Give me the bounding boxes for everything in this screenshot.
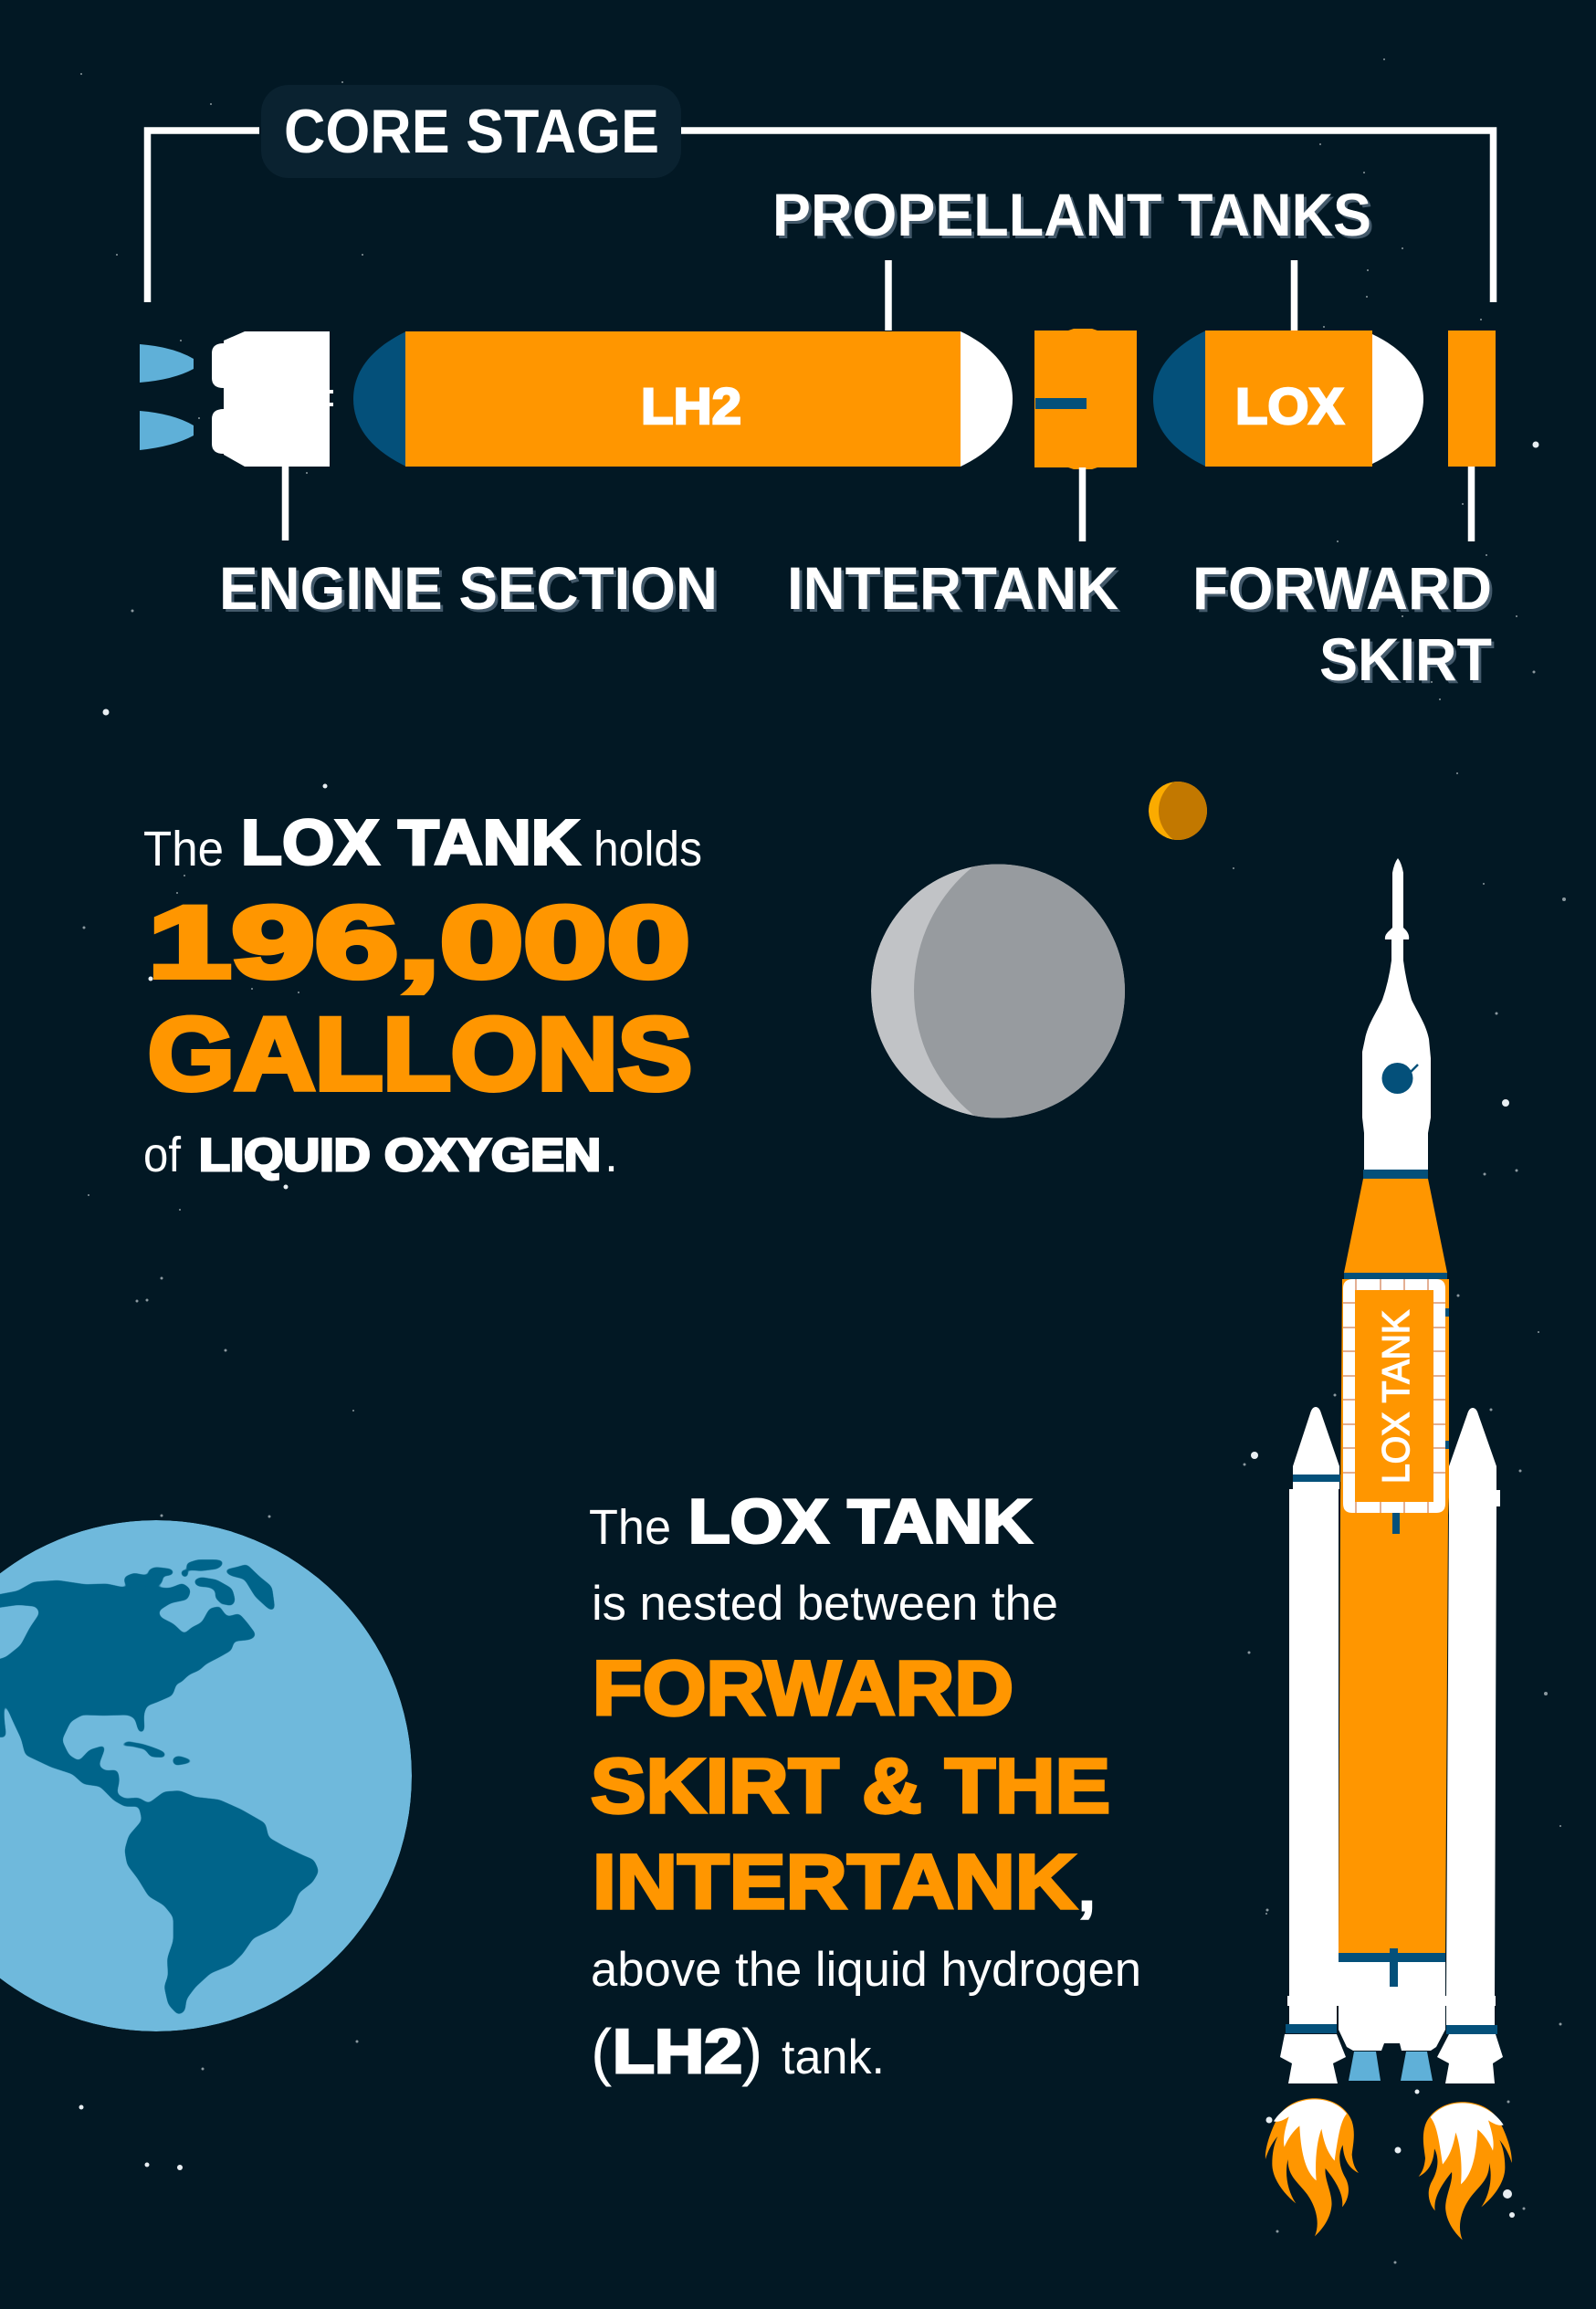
- text block: LOX tank capacity: LOX TANK: [241, 807, 580, 878]
- text block: LOX tank location: LH2: [613, 2017, 742, 2086]
- leader line: intertank: [1079, 467, 1086, 541]
- text block: LOX tank location: tank.: [782, 2031, 885, 2084]
- right flame: [1419, 2102, 1512, 2240]
- stage adapter bands and cone: [1344, 1170, 1447, 1279]
- leader line: engine section: [282, 467, 289, 541]
- LOX tank highlight: [1343, 1279, 1449, 1513]
- highlight: forward skirt and the intertank: SKIRT & THE: [591, 1743, 1110, 1829]
- forward skirt: [1448, 331, 1496, 467]
- left flame: [1265, 2098, 1359, 2236]
- right booster: [1437, 1408, 1503, 2083]
- text block: LOX tank location: The: [589, 1500, 671, 1555]
- label: engine section: ENGINE SECTION: [219, 554, 718, 622]
- label: LOX tank vertical: LOX TANK: [1374, 1310, 1417, 1484]
- mars: [1149, 782, 1207, 840]
- text block: LOX tank capacity: .: [604, 1128, 618, 1182]
- big number: 196,000: 196,000: [148, 886, 690, 999]
- text block: LOX tank location: [589, 1486, 1141, 2087]
- text block: LOX tank location: above the liquid hydrogen: [591, 1943, 1141, 1997]
- text block: LOX tank location: ,: [1079, 1861, 1095, 1922]
- diagram: core stage breakdown: [140, 85, 1496, 693]
- rocket: [1265, 858, 1512, 2240]
- label: forward skirt: FORWARD: [1192, 554, 1492, 622]
- text block: LOX tank capacity: The: [143, 822, 224, 876]
- LH2 tank: [353, 331, 1013, 467]
- label: propellant tanks: PROPELLANT TANKS: [772, 181, 1371, 248]
- capsule and launch abort tower: [1362, 858, 1431, 1170]
- highlight: forward skirt and the intertank: INTERTANK: [593, 1839, 1076, 1925]
- moon: [871, 864, 1125, 1118]
- continents: [0, 1560, 318, 2014]
- highlight: forward skirt and the intertank: [591, 1645, 1110, 1925]
- text block: LOX tank capacity: [143, 807, 702, 1182]
- text block: LOX tank capacity: LIQUID OXYGEN: [199, 1129, 601, 1181]
- LOX tank: LOX: [1235, 377, 1344, 435]
- heading pill: core stage: CORE STAGE: [284, 97, 659, 166]
- LH2 tank: LH2: [641, 377, 741, 435]
- capsule window: [1382, 1063, 1418, 1094]
- label: forward skirt: [1192, 554, 1492, 693]
- engine section of rocket: [1339, 1948, 1445, 2051]
- left booster: [1280, 1407, 1346, 2083]
- LOX tank: [1153, 331, 1423, 467]
- leader line: forward skirt: [1468, 467, 1475, 541]
- earth: [0, 1520, 412, 2031]
- big text: gallons: GALLONS: [148, 997, 692, 1111]
- text block: LOX tank location: ): [741, 2016, 762, 2087]
- engine section: [212, 331, 333, 467]
- core engine nozzles: [1349, 2052, 1433, 2081]
- text block: LOX tank location: (: [591, 2016, 612, 2087]
- highlight: forward skirt and the intertank: FORWARD: [593, 1645, 1013, 1731]
- icon: engine nozzles: [140, 344, 194, 450]
- orange core stage: [1339, 1279, 1449, 1953]
- text block: LOX tank location: LOX TANK: [688, 1486, 1032, 1556]
- leader lines: propellant tanks: [888, 260, 1295, 331]
- text block: LOX tank capacity: holds: [593, 822, 702, 876]
- text block: LOX tank location: is nested between the: [592, 1577, 1058, 1631]
- label: forward skirt: SKIRT: [1319, 625, 1492, 693]
- text block: LOX tank capacity: of: [143, 1128, 182, 1182]
- bracket: core stage span: [148, 131, 1494, 302]
- label: intertank: INTERTANK: [787, 554, 1118, 622]
- intertank: [1034, 329, 1137, 469]
- heading pill: core stage: [261, 85, 681, 178]
